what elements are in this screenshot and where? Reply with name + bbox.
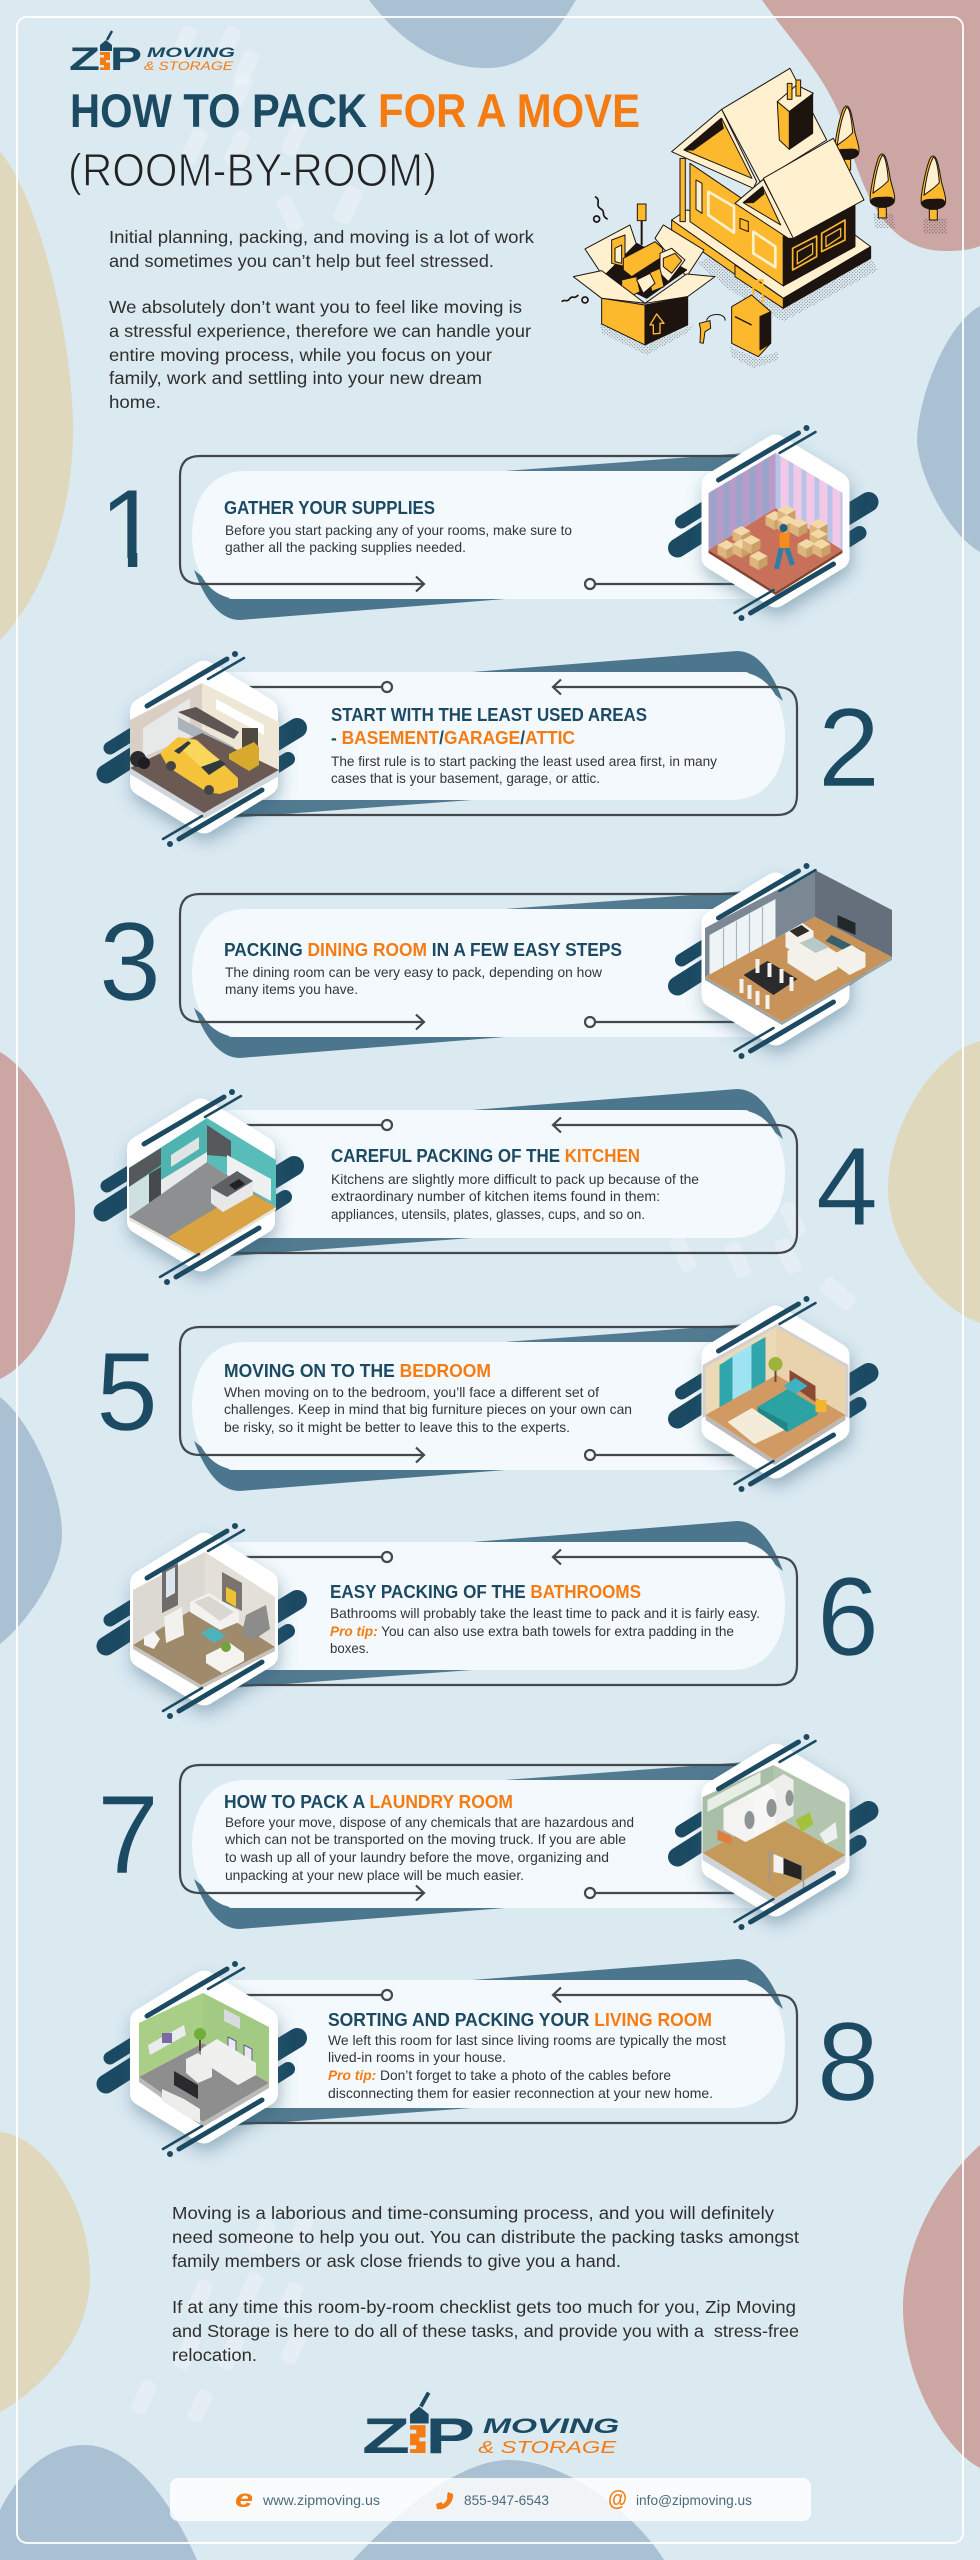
closing text: family members or ask close friends to give you a hand. bbox=[172, 2251, 621, 2271]
card text 7: unpacking at your new place will be much easier. bbox=[225, 1867, 524, 1883]
logo: Zip Moving & Storage (top): P bbox=[110, 41, 142, 77]
card text 2: The first rule is to start packing the least used area first, in many bbox=[331, 753, 717, 769]
intro text: Initial planning, packing, and moving is a lot of work bbox=[109, 227, 534, 247]
intro text: We absolutely don’t want you to feel like moving is bbox=[109, 297, 522, 317]
website: www.zipmoving.us bbox=[262, 2492, 380, 2508]
logo: Zip Moving & Storage (bottom) bbox=[362, 2393, 619, 2464]
card frame 2 bbox=[212, 651, 797, 818]
card text 6: Pro tip: You can also use extra bath towels for extra padding in the bbox=[330, 1623, 734, 1639]
number 2: 2 bbox=[818, 686, 880, 810]
room illustration: bedroom bbox=[678, 1296, 868, 1492]
card text 8 bbox=[328, 2009, 726, 2101]
title bbox=[68, 84, 640, 196]
illustration: house, moving box, suitcase, trees bbox=[562, 68, 947, 368]
room illustration: garage with yellow car bbox=[106, 651, 297, 847]
step 8: living room bbox=[106, 1959, 879, 2157]
number 5: 5 bbox=[96, 1330, 158, 1454]
logo: Zip Moving & Storage (top) bbox=[69, 31, 235, 77]
card text 2: - BASEMENT/GARAGE/ATTIC bbox=[331, 727, 575, 748]
suitcase and keys bbox=[699, 280, 771, 357]
intro text: and sometimes you can’t help but feel stressed. bbox=[109, 251, 494, 271]
card text 1 bbox=[224, 497, 572, 555]
number 6: 6 bbox=[817, 1555, 879, 1679]
logo: Zip Moving & Storage (bottom): & STORAGE bbox=[478, 2437, 618, 2457]
card text 5: MOVING ON TO THE BEDROOM bbox=[224, 1360, 491, 1381]
card text 8: SORTING AND PACKING YOUR LIVING ROOM bbox=[328, 2009, 712, 2030]
card frame 6 bbox=[212, 1521, 797, 1688]
icon: phone bbox=[436, 2492, 453, 2509]
intro text: family, work and settling into your new dream bbox=[109, 368, 482, 388]
phone number: 855-947-6543 bbox=[464, 2492, 549, 2508]
email address: info@zipmoving.us bbox=[636, 2492, 752, 2508]
title: HOW TO PACK bbox=[70, 84, 367, 137]
card text 1: gather all the packing supplies needed. bbox=[225, 539, 466, 555]
number 1: 1 bbox=[99, 467, 161, 591]
icon: email: @ bbox=[608, 2486, 627, 2511]
moving box bbox=[573, 204, 715, 345]
card text 6: EASY PACKING OF THE BATHROOMS bbox=[330, 1581, 641, 1602]
step 3: dining room bbox=[99, 863, 892, 1059]
title: (ROOM-BY-ROOM) bbox=[68, 144, 437, 196]
card frame 7 bbox=[180, 1762, 765, 1929]
card text 7 bbox=[224, 1791, 634, 1883]
step 2: least used areas bbox=[106, 651, 880, 847]
card text 3: The dining room can be very easy to pack, depending on how bbox=[225, 964, 603, 980]
card text 5: be risky, so it might be better to leave this to the experts. bbox=[224, 1419, 570, 1435]
card text 3 bbox=[224, 939, 622, 997]
card text 6 bbox=[330, 1581, 760, 1656]
icon: web: e bbox=[235, 2485, 253, 2513]
closing text bbox=[172, 2203, 799, 2365]
number 8: 8 bbox=[817, 2000, 879, 2124]
closing text: Moving is a laborious and time-consuming process, and you will definitely bbox=[172, 2203, 774, 2223]
card text 8: disconnecting them for easier reconnection at your new home. bbox=[328, 2085, 713, 2101]
card text 2: START WITH THE LEAST USED AREAS bbox=[331, 704, 647, 725]
card text 5: challenges. Keep in mind that big furniture pieces on your own can bbox=[224, 1401, 632, 1417]
halftone shadows bbox=[600, 213, 947, 368]
card text 7: Before your move, dispose of any chemicals that are hazardous and bbox=[225, 1814, 634, 1830]
logo: Zip Moving & Storage (top): Z bbox=[69, 41, 100, 77]
card text 1: Before you start packing any of your rooms, make sure to bbox=[225, 522, 572, 538]
room illustration: empty room with boxes bbox=[678, 425, 868, 621]
card frame 5 bbox=[180, 1324, 765, 1491]
step 6: bathrooms bbox=[106, 1521, 879, 1719]
intro text: entire moving process, while you focus on your bbox=[109, 345, 492, 365]
step 4: kitchen bbox=[103, 1089, 878, 1285]
card text 2: cases that is your basement, garage, or attic. bbox=[331, 770, 600, 786]
logo: Zip Moving & Storage (bottom): Z bbox=[362, 2408, 410, 2464]
room illustration: dining room bbox=[678, 863, 892, 1059]
contact bar bbox=[170, 2478, 811, 2521]
card frame 3 bbox=[180, 891, 765, 1058]
brush marks bbox=[130, 24, 858, 2424]
intro text: home. bbox=[109, 392, 161, 412]
card text 7: which can not be transported on the moving truck. If you are able bbox=[224, 1831, 626, 1847]
room illustration: laundry room bbox=[678, 1734, 868, 1930]
card text 8: lived-in rooms in your house. bbox=[328, 2049, 506, 2065]
closing text: relocation. bbox=[172, 2345, 257, 2365]
card frame 4 bbox=[212, 1089, 797, 1256]
card frame 1 bbox=[180, 453, 765, 620]
card text 6: boxes. bbox=[330, 1640, 369, 1656]
card text 4: appliances, utensils, plates, glasses, cups, and so on. bbox=[331, 1206, 645, 1222]
step 7: laundry room bbox=[97, 1734, 868, 1930]
logo: Zip Moving & Storage (top): & STORAGE bbox=[144, 61, 233, 73]
room illustration: kitchen bbox=[103, 1089, 294, 1285]
card text 8: We left this room for last since living rooms are typically the most bbox=[328, 2032, 726, 2048]
closing text: If at any time this room-by-room checklist gets too much for you, Zip Moving bbox=[172, 2297, 796, 2317]
card text 4: Kitchens are slightly more difficult to pack up because of the bbox=[331, 1171, 699, 1187]
card text 7: HOW TO PACK A LAUNDRY ROOM bbox=[224, 1791, 513, 1812]
house bbox=[672, 68, 871, 308]
card text 6: Bathrooms will probably take the least time to pack and it is fairly easy. bbox=[330, 1605, 760, 1621]
number 3: 3 bbox=[99, 900, 161, 1024]
step 5: bedroom bbox=[96, 1296, 868, 1492]
card frame 8 bbox=[212, 1959, 797, 2126]
room illustration: living room bbox=[106, 1961, 297, 2157]
number 7: 7 bbox=[97, 1773, 159, 1897]
closing text: need someone to help you out. You can distribute the packing tasks amongst bbox=[172, 2227, 799, 2247]
card text 3: many items you have. bbox=[225, 981, 358, 997]
logo: Zip Moving & Storage (bottom): MOVING bbox=[483, 2413, 619, 2438]
card text 1: GATHER YOUR SUPPLIES bbox=[224, 497, 435, 518]
title: FOR A MOVE bbox=[378, 84, 640, 137]
logo: Zip Moving & Storage (bottom): P bbox=[426, 2408, 475, 2464]
squiggles bbox=[562, 197, 608, 303]
number 4: 4 bbox=[816, 1125, 878, 1249]
step 1: gather your supplies bbox=[99, 425, 868, 621]
room illustration: bathroom bbox=[106, 1523, 297, 1719]
number 1 bbox=[110, 490, 138, 567]
intro text: a stressful experience, therefore we can handle your bbox=[109, 321, 531, 341]
card text 4 bbox=[331, 1145, 699, 1222]
logo: Zip Moving & Storage (top): MOVING bbox=[147, 44, 235, 60]
closing text: and Storage is here to do all of these tasks, and provide you with a stress-free bbox=[172, 2321, 799, 2341]
card text 5 bbox=[224, 1360, 632, 1435]
trees bbox=[834, 106, 946, 220]
card text 8: Pro tip: Don’t forget to take a photo of the cables before bbox=[328, 2067, 671, 2083]
intro text bbox=[109, 227, 534, 412]
card text 7: to wash up all of your laundry before the move, organizing and bbox=[225, 1849, 609, 1865]
card text 2 bbox=[331, 704, 717, 786]
card text 3: PACKING DINING ROOM IN A FEW EASY STEPS bbox=[224, 939, 622, 960]
card text 5: When moving on to the bedroom, you’ll face a different set of bbox=[224, 1384, 599, 1400]
card text 4: CAREFUL PACKING OF THE KITCHEN bbox=[331, 1145, 640, 1166]
card text 4: extraordinary number of kitchen items found in them: bbox=[331, 1188, 660, 1204]
